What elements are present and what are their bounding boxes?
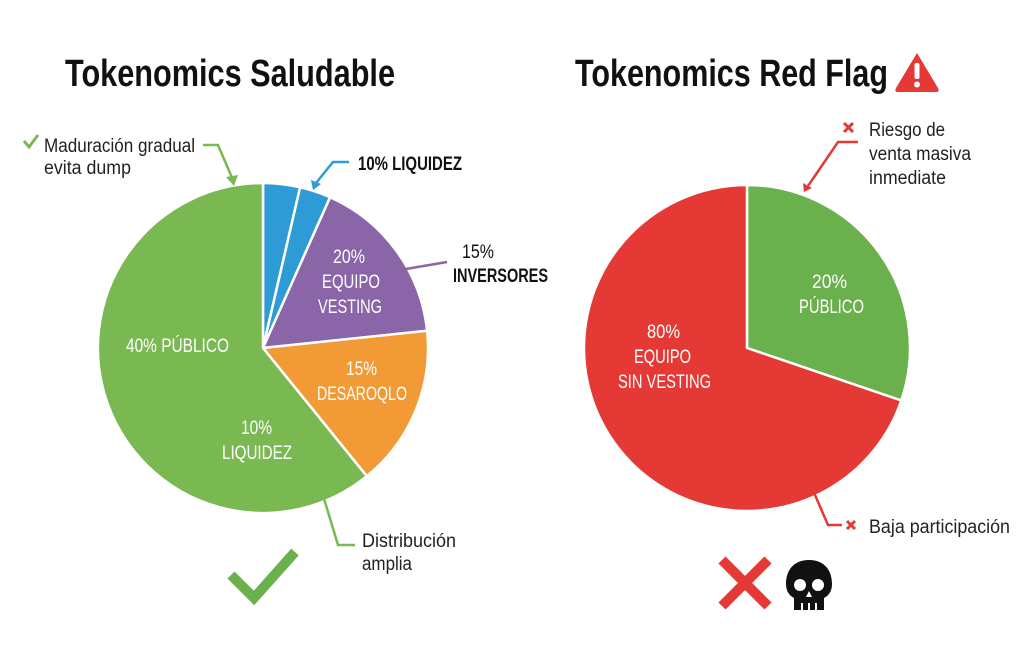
callout: riesgo: venta masiva [869, 144, 971, 165]
callout: riesgo: inmediate [869, 168, 946, 189]
pie labels: healthy: 40% PÚBLICO [126, 335, 229, 357]
pie labels: healthy: 20% [333, 247, 365, 268]
title: red flag: Tokenomics Red Flag [575, 53, 888, 95]
callout: maduracion: evita dump [44, 158, 131, 179]
pie labels: red flag: EQUIPO [634, 347, 691, 368]
pie labels: red flag [618, 272, 864, 393]
pie labels: healthy: EQUIPO [322, 272, 380, 293]
callout: baja participacion [807, 480, 1010, 538]
pie labels: red flag: PÚBLICO [799, 296, 864, 318]
pie labels: healthy: LIQUIDEZ [222, 443, 292, 464]
pie labels: healthy: 10% [241, 418, 272, 439]
pie chart: healthy [98, 183, 428, 513]
icon: warning [895, 53, 939, 92]
callout: riesgo: Riesgo de [869, 120, 945, 141]
pie labels: healthy: VESTING [318, 297, 382, 318]
icon: skull [786, 560, 832, 610]
callout: liquidez [311, 154, 462, 190]
pie labels: red flag: SIN VESTING [618, 372, 711, 393]
callout: distribucion [317, 484, 456, 575]
callout: maduracion: Maduración gradual [44, 136, 195, 157]
callout: maduracion [24, 135, 238, 186]
callout: baja participacion: Baja participación [869, 517, 1010, 538]
pie labels: healthy: DESAROQLO [317, 384, 407, 405]
pie labels: red flag: 20% [812, 272, 847, 293]
icon: checkmark [231, 552, 295, 598]
pie chart: red flag [584, 185, 910, 511]
icon: red x [722, 560, 768, 606]
title: healthy: Tokenomics Saludable [65, 53, 395, 95]
callout: distribucion: Distribución [362, 531, 456, 552]
callout: liquidez: 10% LIQUIDEZ [358, 154, 462, 175]
callout: inversores: INVERSORES [453, 266, 548, 287]
pie labels: red flag: 80% [647, 322, 680, 343]
callout: inversores [400, 242, 548, 287]
callout: distribucion: amplia [362, 554, 412, 575]
pie labels: healthy: 15% [346, 359, 377, 380]
callout: inversores: 15% [462, 242, 494, 263]
pie labels: healthy [126, 247, 407, 464]
callout: riesgo [803, 120, 971, 192]
